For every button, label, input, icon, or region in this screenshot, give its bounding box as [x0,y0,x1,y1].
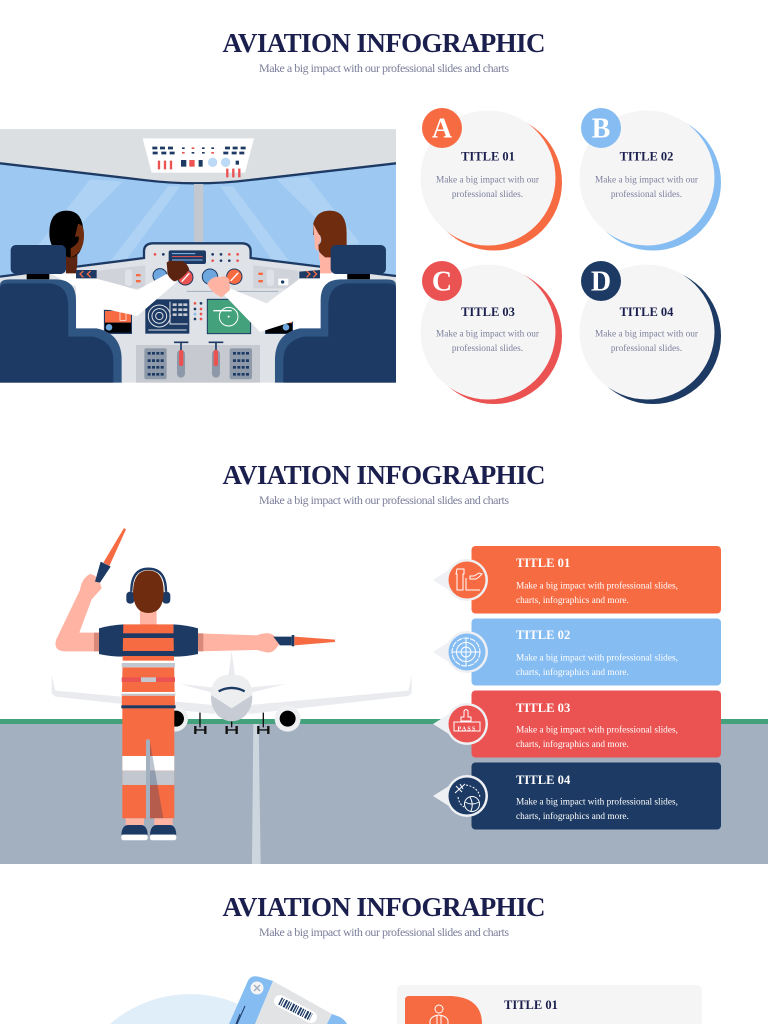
card D: TITLE 04 [620,305,674,319]
list row 1: Make a big impact with professional slides, [516,580,678,592]
card C: TITLE 03 [461,305,515,319]
icon: radar [433,631,488,673]
list row 2: TITLE 02 [516,628,570,642]
list row 2 [433,618,721,686]
list row 3: Make a big impact with professional slides, [516,724,678,736]
title: section 2: AVIATION INFOGRAPHIC [222,460,546,490]
green navigation display [207,299,251,334]
title: section 3: AVIATION INFOGRAPHIC [222,892,546,922]
list row 3: TITLE 03 [516,701,570,715]
right pilot [207,211,396,383]
left pilot [0,211,189,383]
card A: TITLE 01 [461,150,515,164]
card B [580,108,721,250]
icon: boarding pass stamp [433,703,488,745]
card B: Make a big impact with our [595,176,699,186]
title: section 1 [222,28,546,75]
icon: boarding pass stamp: PASS [457,726,477,732]
card C: professional slides. [452,343,523,354]
list row 1: charts, infographics and more. [516,595,629,606]
illustration: airplane and marshaller [52,528,412,864]
badge B: B [592,114,610,144]
title: section 2: Make a big impact with our professional slides and charts [259,493,509,507]
card A: Make a big impact with our [436,176,540,186]
badge B [581,108,621,148]
title: section 3 [222,892,546,939]
panel: list card 01: TITLE 01 [504,998,558,1012]
radar display [145,299,202,334]
card C [420,261,562,404]
icon tab: person [405,996,482,1024]
ground: green strip and tarmac [0,719,768,864]
card D: professional slides. [611,343,682,354]
title: section 3: Make a big impact with our professional slides and charts [259,925,509,939]
icon: control tower and plane [433,559,488,601]
pedestal with levers and keypads [136,342,260,383]
card C: Make a big impact with our [436,330,540,340]
illustration: boarding pass over pale circle [110,976,347,1024]
illustration: cockpit with two pilots [0,129,396,383]
title: section 2 [222,460,546,507]
list row 4: TITLE 04 [516,773,571,787]
list row 4 [433,762,721,830]
list row 3 [433,690,721,758]
badge C: C [432,266,452,298]
list row 3: charts, infographics and more. [516,739,629,750]
title: section 1: AVIATION INFOGRAPHIC [222,28,546,58]
centre screen and gauges [153,250,278,291]
marshaller figure [56,528,335,840]
list row 2: Make a big impact with professional slides, [516,652,678,664]
list row 2: charts, infographics and more. [516,667,629,678]
badge A [422,108,462,148]
overhead switch panel [143,138,254,177]
badge D [581,261,621,301]
icon: plane and globe [433,775,488,817]
card B: professional slides. [611,189,682,200]
badge A: A [432,114,453,144]
panel: list card 01 [397,985,702,1024]
list row 4: charts, infographics and more. [516,811,629,822]
card D [580,261,721,404]
list row 1: TITLE 01 [516,556,570,570]
card D: Make a big impact with our [595,330,699,340]
list row 1 [433,546,721,614]
card A: professional slides. [452,189,523,200]
card A [420,108,562,250]
airplane [52,651,412,734]
card B: TITLE 02 [620,150,673,164]
side instrument panels [97,265,298,288]
badge C [422,261,462,301]
boarding pass [229,976,347,1024]
badge D: D [591,266,611,298]
title: section 1: Make a big impact with our professional slides and charts [259,61,509,75]
list row 4: Make a big impact with professional slides, [516,796,678,808]
